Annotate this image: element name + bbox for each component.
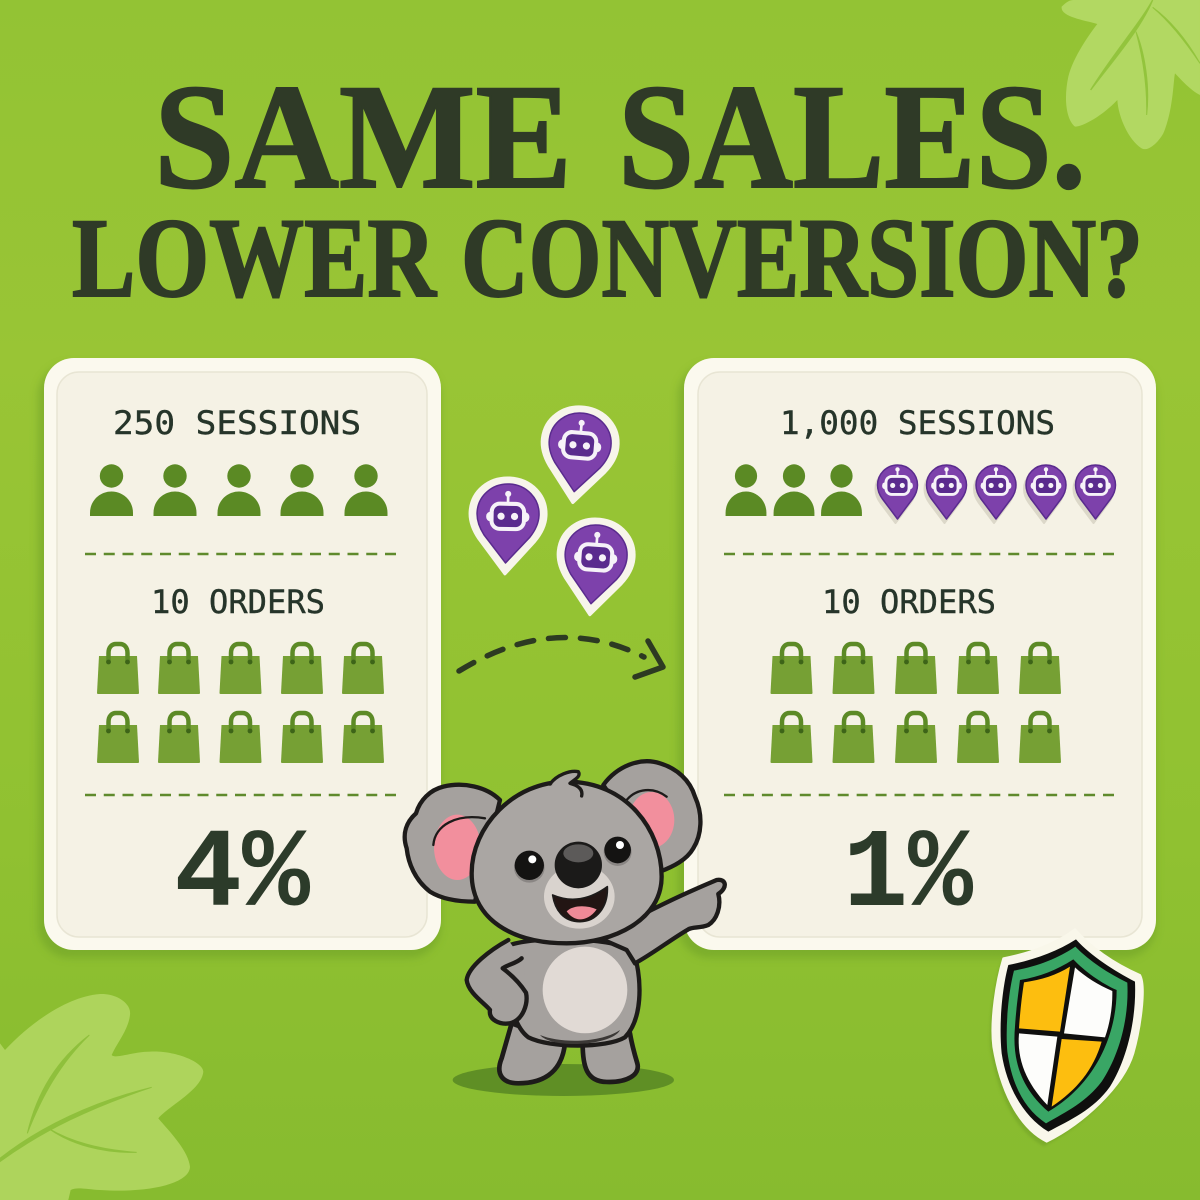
koala right arm	[600, 880, 725, 963]
koala left ear	[405, 785, 500, 902]
koala mouth	[553, 887, 607, 922]
koala body	[508, 939, 639, 1046]
mascot: koala pointing	[405, 761, 725, 1096]
label: 10 orders: 10 ORDERS	[151, 583, 325, 621]
koala tuft	[550, 771, 582, 796]
koala left arm	[467, 940, 527, 1024]
title line 2	[72, 196, 1143, 321]
icon: shield	[990, 929, 1143, 1146]
koala belly	[543, 947, 627, 1033]
icons: ten shopping bags	[97, 644, 384, 763]
panel: before bots	[38, 358, 441, 958]
title	[72, 54, 1143, 321]
stat: 4 percent: 4%	[174, 812, 311, 939]
stat: 1 percent: 1%	[843, 812, 974, 939]
koala legs	[499, 1023, 638, 1083]
icons: three people	[726, 464, 862, 516]
koala head	[472, 782, 662, 943]
koala nose	[555, 842, 602, 888]
title line 2: LOWER	[72, 196, 437, 321]
label: 250 sessions: 250 SESSIONS	[113, 404, 361, 442]
title line 1: SALES.	[618, 54, 1086, 220]
title line 1	[154, 54, 1086, 220]
icons: five bot pins	[876, 465, 1116, 523]
arrow: dashed curve	[459, 638, 663, 677]
decorative leaf: bottom left	[0, 994, 203, 1200]
label: 10 orders: 10 ORDERS	[822, 583, 996, 621]
icons: five people	[90, 464, 388, 516]
ground shadow	[453, 1064, 674, 1096]
label: 1,000 sessions: 1,000 SESSIONS	[780, 404, 1055, 442]
icons: ten shopping bags	[770, 644, 1061, 763]
koala muzzle	[544, 865, 615, 929]
panel: after bots	[678, 358, 1156, 958]
koala eyes	[514, 837, 632, 883]
icons: floating bot pins	[467, 403, 638, 619]
koala body shading	[540, 1030, 620, 1044]
title line 1: SAME	[154, 54, 572, 220]
koala right ear	[603, 761, 700, 872]
decorative leaf: top right	[1062, 0, 1200, 149]
